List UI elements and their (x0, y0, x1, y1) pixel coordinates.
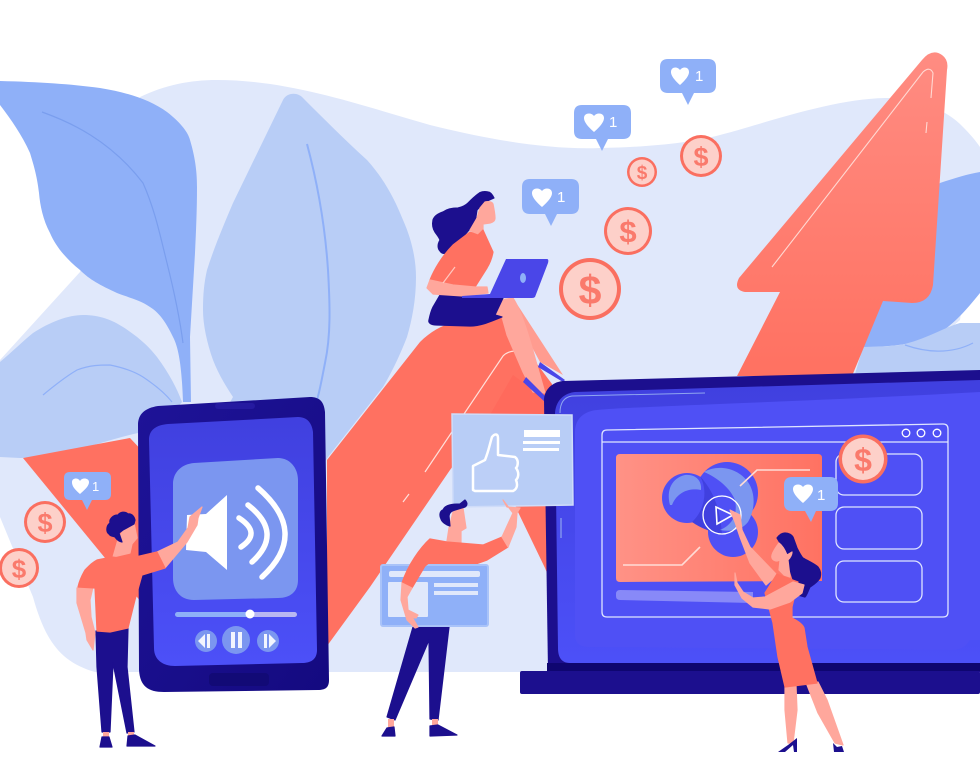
playback buttons (195, 626, 279, 654)
shoes (100, 735, 155, 747)
coin 3 (604, 207, 652, 255)
ankles (103, 732, 134, 738)
man pointing at phone (77, 507, 202, 747)
screen (555, 380, 980, 663)
coin 6 (0, 548, 39, 588)
coin 2: $ (637, 163, 648, 184)
like bubble 5: 1 (817, 487, 825, 504)
sitting woman (427, 192, 565, 402)
hair (433, 192, 494, 253)
torso (78, 552, 165, 632)
skirt (429, 295, 503, 326)
like bubble 5 (784, 477, 838, 522)
legs (785, 685, 797, 743)
coin 7: $ (854, 442, 872, 478)
video area (616, 454, 822, 603)
torso (402, 537, 508, 585)
legs (387, 627, 449, 720)
coin 2 (627, 157, 657, 187)
coin 1 (680, 135, 722, 177)
speaker icon (186, 488, 285, 577)
leaf: lower left (0, 315, 182, 458)
leaf: large left (0, 81, 197, 402)
hair (777, 533, 821, 597)
thumb icon (473, 434, 518, 491)
speaker panel (173, 458, 298, 600)
progress slider (175, 610, 297, 618)
hair (107, 512, 135, 542)
base (520, 671, 980, 694)
laptop (520, 370, 980, 694)
top (430, 230, 493, 295)
like bubble 2 (574, 105, 631, 151)
arm (427, 280, 488, 296)
thumbs-up card (452, 414, 573, 507)
right lower leaf (855, 323, 980, 374)
like bubble 1 (660, 59, 716, 105)
pointing arm (157, 507, 202, 568)
face (772, 543, 792, 577)
raised arm (730, 510, 777, 585)
phone (138, 397, 329, 692)
coin 7 (838, 434, 888, 484)
web card (381, 565, 488, 626)
dress (765, 574, 817, 687)
sidebar cards (836, 454, 922, 602)
browser window (602, 424, 948, 617)
shoes (382, 725, 457, 736)
growth arrow: lower band (23, 317, 552, 646)
coin 5: $ (37, 508, 53, 538)
coin 3: $ (619, 214, 637, 249)
growth arrow: head (737, 52, 947, 376)
sleeve over card (402, 539, 447, 588)
rear leg (513, 298, 563, 375)
front leg (495, 298, 545, 393)
coin 6: $ (12, 554, 27, 584)
coin 1: $ (693, 142, 709, 172)
face (470, 202, 495, 235)
left arm (77, 587, 95, 650)
ankles (388, 719, 438, 728)
like bubble 4: 1 (92, 479, 99, 494)
man holding card (381, 500, 520, 736)
like bubble 3 (522, 179, 579, 226)
cloud (662, 462, 810, 557)
neck and face (113, 523, 137, 557)
coin 4 (559, 258, 621, 320)
like bubble 3: 1 (557, 189, 565, 206)
leaf: center (203, 94, 416, 500)
raised arm (502, 500, 520, 547)
card text lines (523, 430, 560, 451)
heels (778, 738, 844, 752)
coin 5 (24, 501, 66, 543)
laptop (462, 259, 548, 298)
shoes (523, 362, 565, 402)
screen (149, 417, 317, 666)
background blob (0, 80, 980, 672)
like bubble 2: 1 (609, 114, 617, 131)
lid (544, 370, 980, 672)
like bubble 1: 1 (695, 68, 703, 85)
coin 4: $ (579, 267, 602, 313)
standing woman (730, 510, 844, 752)
hair (440, 500, 467, 526)
legs (96, 628, 134, 733)
lower arm (401, 583, 418, 628)
lower arm (735, 573, 804, 609)
like bubble 4 (64, 472, 111, 510)
neck and face (447, 508, 466, 543)
right back leaf (863, 172, 980, 347)
